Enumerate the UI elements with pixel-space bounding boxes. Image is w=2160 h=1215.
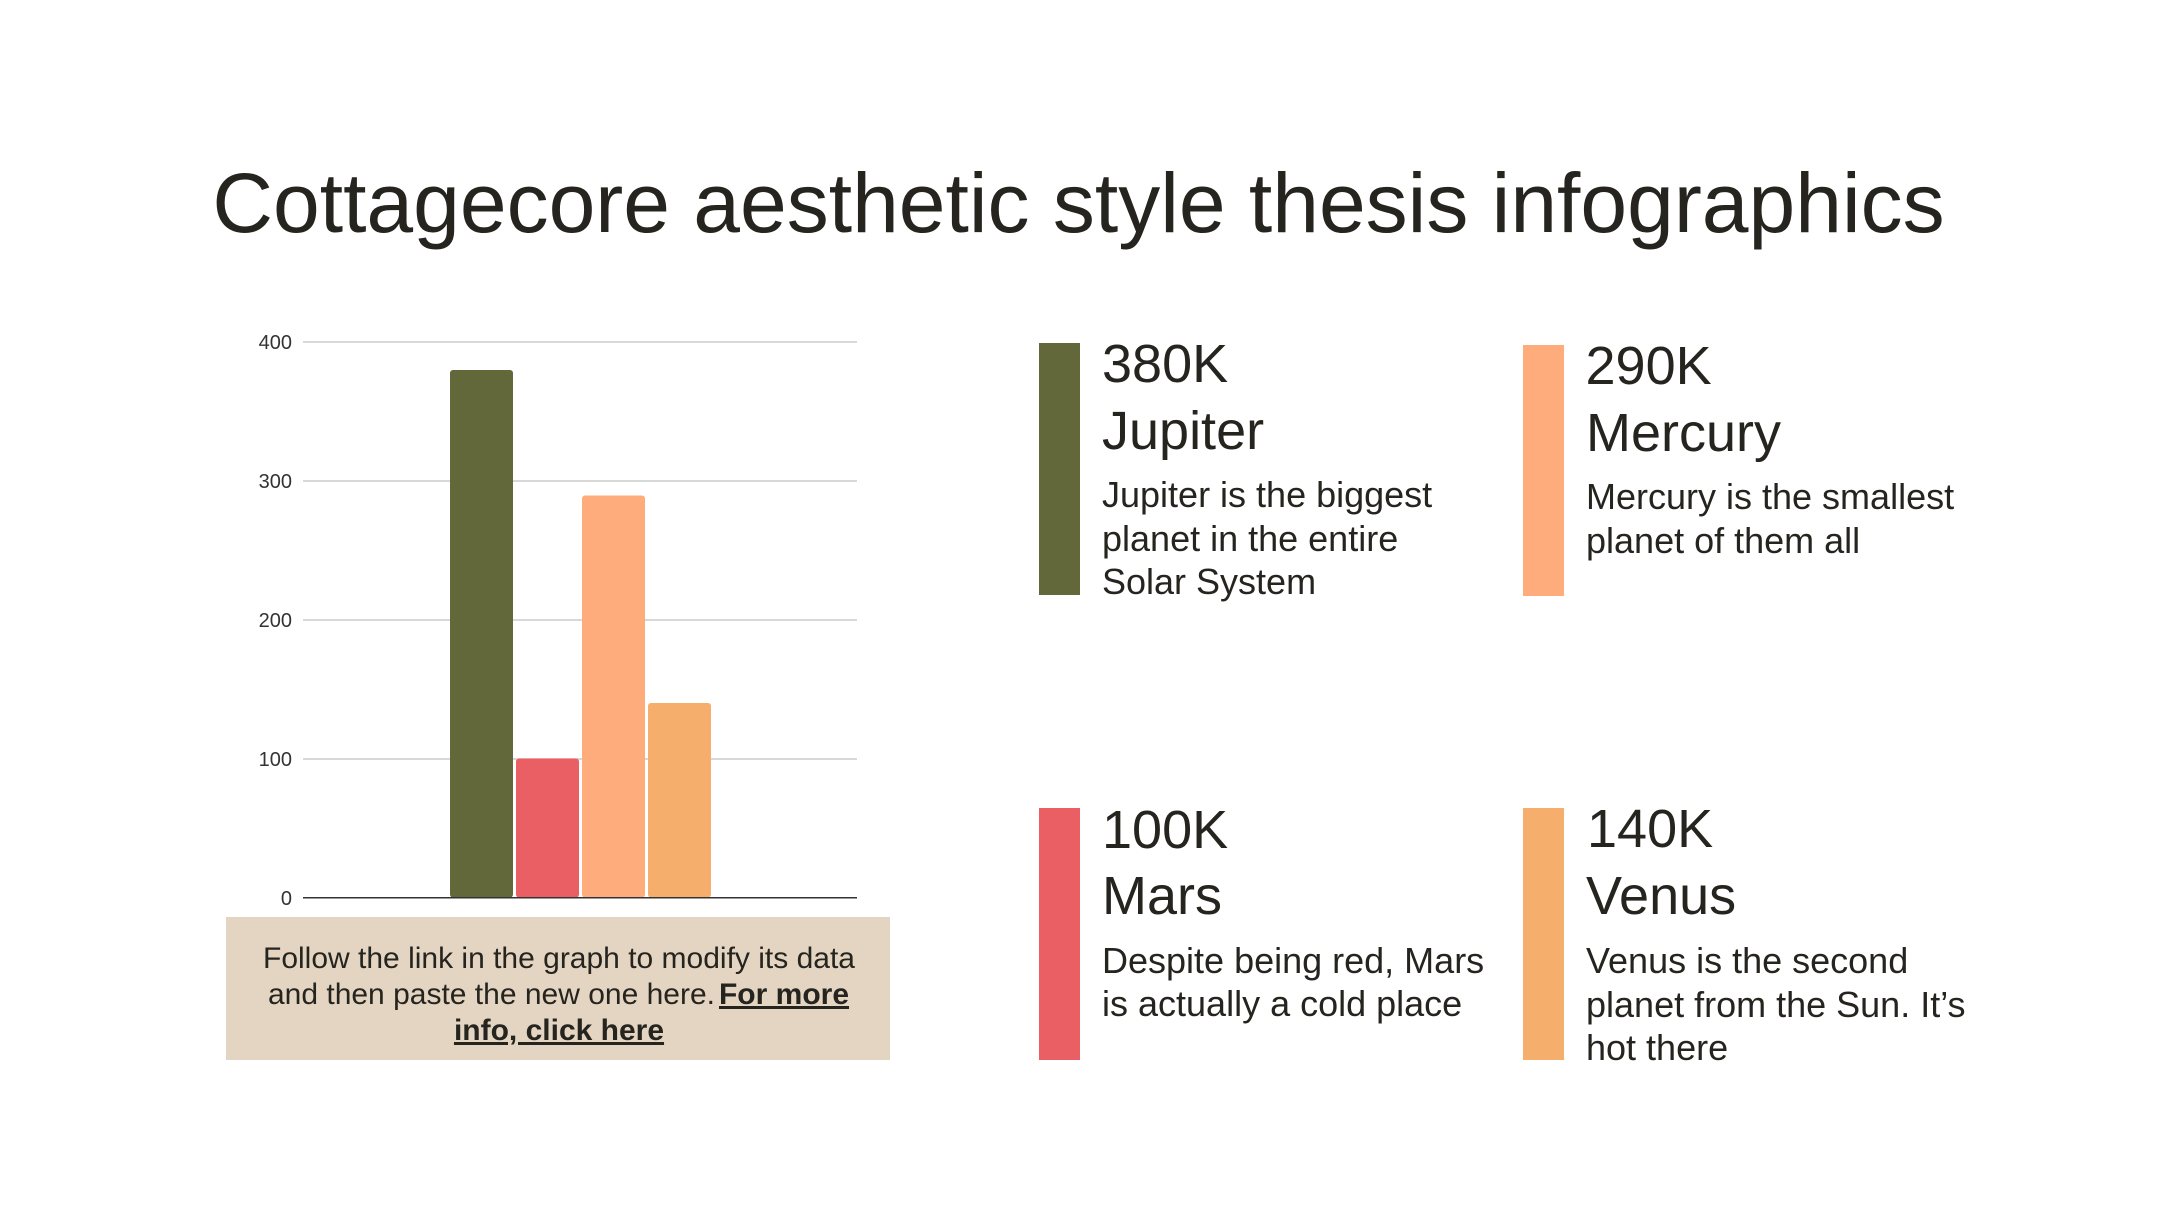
name: Mercury: Mercury bbox=[1586, 403, 1781, 463]
name: Jupiter: Jupiter bbox=[1102, 401, 1264, 461]
panel: Jupiter bbox=[1039, 334, 1432, 602]
value: 140K: 140K bbox=[1587, 799, 1713, 859]
caption box bbox=[226, 917, 890, 1060]
bar: Venus 140 bbox=[648, 703, 711, 898]
color bar: Mars bbox=[1039, 808, 1080, 1060]
description: Mars: Despite being red, Mars bbox=[1102, 940, 1484, 981]
caption text: info, click here bbox=[454, 1014, 664, 1047]
bar chart bbox=[259, 332, 857, 910]
description: Mars: is actually a cold place bbox=[1102, 983, 1462, 1024]
description: Venus: hot there bbox=[1586, 1027, 1728, 1068]
name: Mars: Mars bbox=[1102, 866, 1222, 926]
caption text: and then paste the new one here.For more bbox=[268, 978, 849, 1011]
y axis labels bbox=[259, 332, 292, 910]
y axis labels: 400 bbox=[259, 332, 292, 354]
y axis labels: 200 bbox=[259, 610, 292, 632]
description: Mercury bbox=[1586, 476, 1954, 561]
color bar: Jupiter bbox=[1039, 343, 1080, 595]
panel: Mercury bbox=[1523, 336, 1954, 596]
description: Mercury: Mercury is the smallest bbox=[1586, 476, 1954, 517]
caption text: Follow the link in the graph to modify its data bbox=[263, 942, 855, 975]
bar: Jupiter 380 bbox=[450, 370, 513, 898]
description: Jupiter: Solar System bbox=[1102, 561, 1316, 602]
description: Venus: planet from the Sun. It’s bbox=[1586, 984, 1966, 1025]
bar: Mars 100 bbox=[516, 758, 579, 898]
name: Venus: Venus bbox=[1586, 866, 1736, 926]
y axis labels: 0 bbox=[281, 888, 292, 910]
panel: Mars bbox=[1039, 800, 1484, 1060]
description: Jupiter: Jupiter is the biggest bbox=[1102, 474, 1432, 515]
description: Jupiter: planet in the entire bbox=[1102, 518, 1398, 559]
y axis labels: 300 bbox=[259, 471, 292, 493]
value: 100K: 100K bbox=[1102, 800, 1228, 860]
description: Venus bbox=[1586, 940, 1966, 1068]
color bar: Venus bbox=[1523, 808, 1564, 1060]
value: 290K: 290K bbox=[1586, 336, 1712, 396]
description: Jupiter bbox=[1102, 474, 1432, 602]
description: Venus: Venus is the second bbox=[1586, 940, 1908, 981]
description: Mercury: planet of them all bbox=[1586, 520, 1860, 561]
color bar: Mercury bbox=[1523, 345, 1564, 596]
y axis labels: 100 bbox=[259, 749, 292, 771]
description: Mars bbox=[1102, 940, 1484, 1024]
value: 380K: 380K bbox=[1102, 334, 1228, 394]
panel: Venus bbox=[1523, 799, 1966, 1068]
title: Cottagecore aesthetic style thesis infographics bbox=[212, 156, 1945, 250]
bar: Mercury 290 bbox=[582, 496, 645, 898]
caption text bbox=[263, 942, 855, 1047]
